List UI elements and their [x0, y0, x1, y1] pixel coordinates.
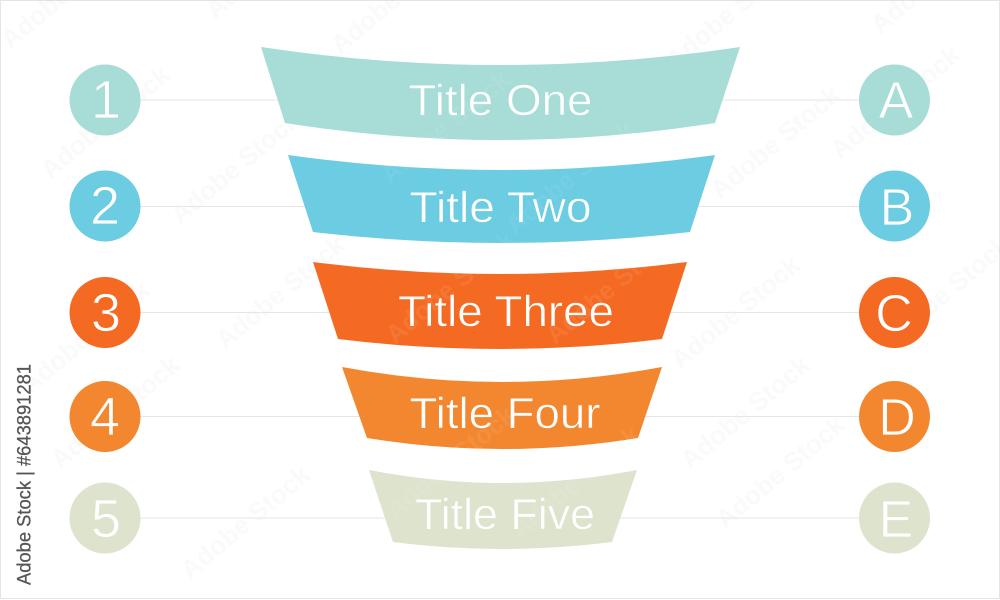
badge 5: [70, 482, 140, 554]
funnel band 2: Title Two: Title Two: [410, 183, 592, 232]
funnel band 5: Title Five: Title Five: [415, 490, 595, 539]
text: Adobe Stock: [665, 249, 806, 375]
funnel band 5: Title Five: [369, 470, 637, 549]
funnel band 2: Title Two: [288, 155, 715, 243]
badge A: A: [879, 72, 914, 130]
text: Adobe Stock: [210, 229, 351, 355]
text: Adobe Stock: [825, 39, 966, 165]
badge 3: 3: [91, 283, 121, 343]
text: Adobe Stock: [15, 274, 156, 400]
badge B: B: [880, 179, 914, 237]
badge 1: 1: [91, 70, 121, 130]
badge 1: [70, 64, 140, 136]
text: Adobe Stock: [165, 104, 306, 230]
badge E: E: [879, 491, 913, 549]
badge D: [859, 381, 930, 452]
watermark over funnel: [375, 64, 681, 545]
badge 4: 4: [90, 387, 120, 447]
badge 2: [70, 170, 140, 242]
badge D: D: [878, 389, 916, 447]
funnel band 3: Title Three: Title Three: [398, 287, 614, 336]
funnel band 3: Title Three: [313, 262, 687, 349]
badge 3: [70, 277, 140, 348]
badge E: [859, 482, 930, 554]
watermark over funnel: Adobe Stock: [380, 224, 521, 350]
vertical stock credit: Adobe Stock | #643891281: [14, 364, 36, 585]
watermark over funnel: Adobe Stock: [505, 419, 646, 545]
badge A: [859, 64, 930, 136]
text: Adobe Stock: [675, 349, 816, 475]
badge 5: 5: [91, 489, 121, 549]
badge C: [859, 277, 930, 348]
badge B: [859, 170, 930, 242]
badge C: C: [875, 285, 913, 343]
text: Adobe Stock: [175, 459, 316, 585]
text: Adobe Stock: [35, 59, 176, 185]
text: Adobe Stock: [45, 349, 186, 475]
watermark over funnel: Adobe Stock: [540, 224, 681, 350]
watermark over funnel: Adobe Stock: [380, 399, 521, 525]
watermark over funnel: Adobe Stock: [375, 64, 516, 190]
funnel band 1: Title One: [261, 47, 740, 140]
funnel band 1: Title One: Title One: [408, 76, 592, 125]
text: Adobe Stock: [705, 79, 846, 205]
badge 4: [70, 381, 140, 452]
funnel band 4: Title Four: Title Four: [410, 389, 600, 438]
text: Adobe Stock: [710, 409, 851, 535]
funnel band 4: Title Four: [342, 367, 662, 449]
badge 2: 2: [90, 176, 120, 236]
watermark over funnel: Adobe Stock: [500, 114, 641, 240]
